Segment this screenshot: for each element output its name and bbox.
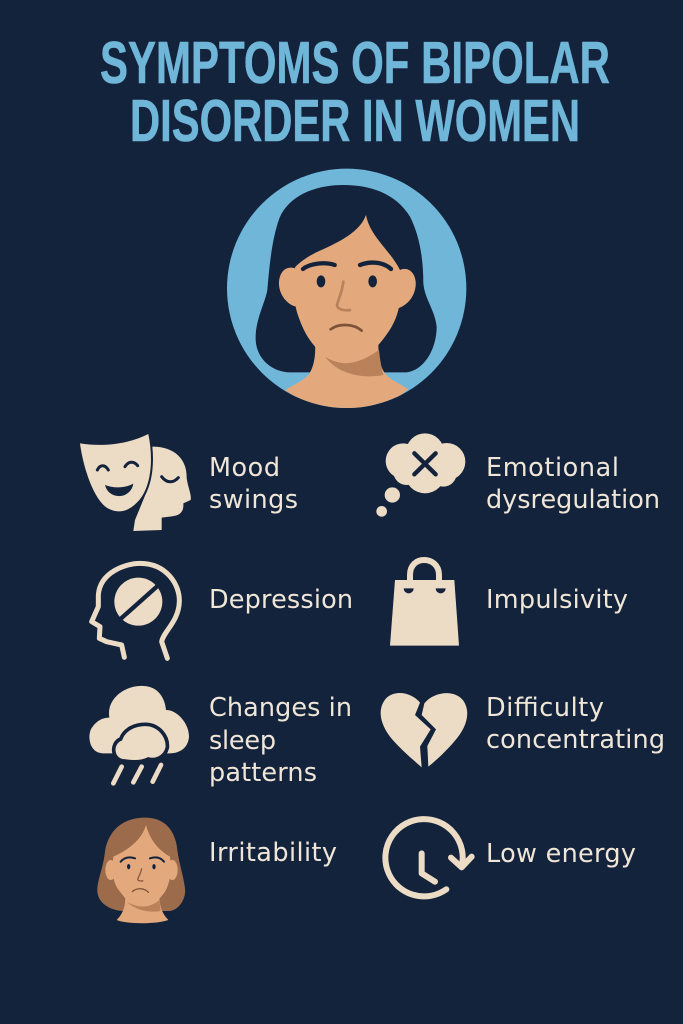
label: mood swings <box>209 453 298 515</box>
icon: shopping bag <box>390 560 459 646</box>
label: depression: Depression <box>209 585 353 615</box>
icon: clock with arrow <box>385 819 472 896</box>
icon: rain cloud <box>89 686 189 783</box>
icon: thought cloud with x <box>376 433 465 517</box>
label: mood swings: Mood <box>209 453 280 483</box>
illustration: woman portrait in blue circle <box>227 169 466 413</box>
icon: head with pill <box>92 563 179 658</box>
label: irritability: Irritability <box>209 838 337 868</box>
icon: theatre masks <box>80 434 191 531</box>
label: emotional dysregulation: Emotional <box>486 453 619 483</box>
icon: broken heart <box>381 693 467 767</box>
label: difficulty concentrating <box>486 693 665 755</box>
label: impulsivity: Impulsivity <box>486 585 628 615</box>
label: difficulty concentrating: concentrating <box>486 725 665 755</box>
label: changes in sleep patterns: Changes in <box>209 693 352 723</box>
icon: small woman face <box>97 818 185 923</box>
label: low energy: Low energy <box>486 839 636 869</box>
label: changes in sleep patterns <box>209 693 352 788</box>
label: emotional dysregulation: dysregulation <box>486 485 660 515</box>
label: emotional dysregulation <box>486 453 660 515</box>
label: difficulty concentrating: Difficulty <box>486 693 604 723</box>
label: changes in sleep patterns: patterns <box>209 758 317 788</box>
title <box>100 30 610 154</box>
label: changes in sleep patterns: sleep <box>209 726 276 756</box>
label: mood swings: swings <box>209 485 298 515</box>
